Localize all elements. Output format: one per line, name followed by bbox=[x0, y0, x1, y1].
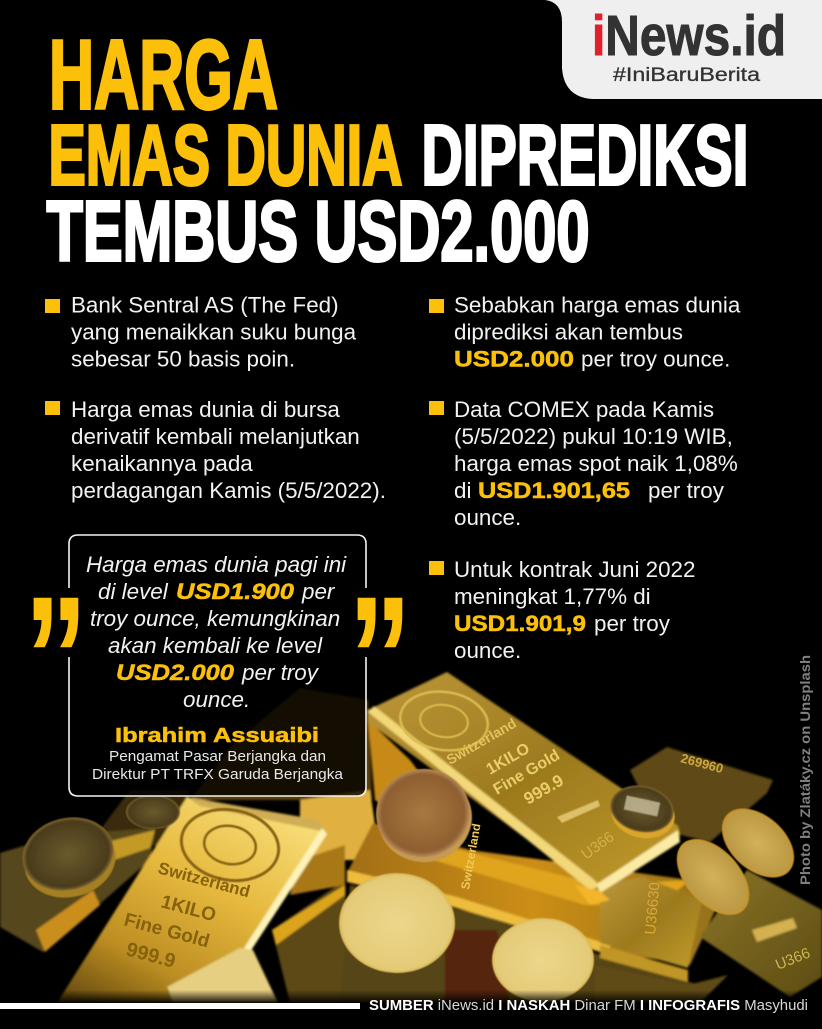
right quote mark: ” bbox=[348, 559, 412, 756]
embossed bar text: 999.9 bbox=[124, 939, 178, 973]
bullet block 5: ounce. bbox=[454, 638, 521, 663]
left column bullets bbox=[45, 292, 386, 503]
bullet block 4: (5/5/2022) pukul 10:19 WIB, bbox=[454, 424, 733, 449]
title: EMAS DUNIA bbox=[48, 108, 402, 204]
coin: american eagle bbox=[15, 808, 123, 907]
embossed bar text: 1KILO bbox=[484, 740, 533, 778]
embossed bar text: Switzerland bbox=[156, 859, 252, 901]
photo: pile of gold bars and coins bbox=[0, 672, 822, 1029]
embossed bar text: 999.9 bbox=[520, 771, 567, 808]
author title: Direktur PT TRFX Garuda Berjangka bbox=[92, 766, 344, 783]
embossed bar text: Switzerland bbox=[444, 715, 519, 768]
coin: krugerrand bbox=[369, 762, 479, 869]
bullet block 3 bbox=[429, 292, 741, 372]
coin: tilted right back bbox=[709, 795, 807, 891]
bullet block 1: Bank Sentral AS (The Fed) bbox=[71, 292, 339, 318]
bullet block 1 bbox=[45, 292, 357, 372]
bullet block 5: per troy bbox=[594, 611, 671, 636]
embossed bar text: Switzerland bbox=[458, 822, 484, 891]
bullet block 2: kenaikannya pada bbox=[71, 451, 253, 476]
bullet block 4: USD1.901,65 bbox=[478, 478, 630, 503]
quote text: ounce. bbox=[183, 687, 250, 712]
coin: tilted right front bbox=[663, 825, 763, 929]
embossed bar text: 269960 bbox=[679, 750, 725, 776]
logo wordmark: iNews.id bbox=[592, 4, 786, 68]
bullet block 5: meningkat 1,77% di bbox=[454, 584, 651, 609]
bullet block 2: Harga emas dunia di bursa bbox=[71, 397, 340, 422]
bullet block 1: sebesar 50 basis poin. bbox=[71, 346, 295, 372]
bullet block 4: di bbox=[454, 478, 471, 503]
bullet block 4: per troy bbox=[648, 478, 725, 503]
title: TEMBUS USD2.000 bbox=[46, 184, 590, 280]
bullet block 2: derivatif kembali melanjutkan bbox=[71, 424, 360, 449]
quote text: per troy bbox=[241, 660, 320, 685]
right column bullets bbox=[429, 292, 741, 663]
coin: plain bright bbox=[339, 873, 455, 973]
bullet block 3: diprediksi akan tembus bbox=[454, 320, 683, 344]
quote text: di level bbox=[98, 579, 169, 604]
quote text: USD1.900 bbox=[176, 579, 295, 604]
bullet block 5: Untuk kontrak Juni 2022 bbox=[454, 557, 695, 582]
quote box bbox=[24, 535, 412, 796]
bullet block 3: USD2.000 bbox=[454, 346, 574, 372]
bullet block 4: Data COMEX pada Kamis bbox=[454, 397, 714, 422]
embossed bar text: Fine Gold bbox=[490, 747, 563, 798]
embossed bar text: U366 bbox=[773, 945, 813, 974]
bullet block 3: per troy ounce. bbox=[581, 346, 730, 372]
bullet block 1: yang menaikkan suku bunga bbox=[71, 320, 357, 344]
bullet block 5: USD1.901,9 bbox=[454, 611, 586, 636]
footer bbox=[0, 997, 808, 1014]
bullet block 2: perdagangan Kamis (5/5/2022). bbox=[71, 478, 386, 503]
bullet block 4: ounce. bbox=[454, 505, 521, 530]
photo credit: Photo by Zlatáky.cz on Unsplash bbox=[797, 655, 813, 885]
bullet block 4 bbox=[429, 397, 738, 530]
bullet block 5 bbox=[429, 557, 695, 663]
embossed bar text: Fine Gold bbox=[122, 910, 212, 953]
quote text: USD2.000 bbox=[116, 660, 235, 685]
quote text: akan kembali ke level bbox=[108, 633, 323, 658]
author title: Pengamat Pasar Berjangka dan bbox=[109, 748, 326, 765]
bullet block 4: harga emas spot naik 1,08% bbox=[454, 451, 738, 476]
left quote mark: ” bbox=[24, 559, 88, 756]
quote text: troy ounce, kemungkinan bbox=[90, 606, 340, 631]
quote text: per bbox=[301, 579, 336, 604]
coin: bright engraved bbox=[492, 918, 594, 1002]
coin: philharmonic bbox=[606, 780, 679, 844]
embossed bar text bbox=[122, 715, 813, 974]
embossed bar text: U36630 bbox=[642, 882, 664, 935]
bullet block 3: Sebabkan harga emas dunia bbox=[454, 292, 741, 318]
quote author: Ibrahim Assuaibi bbox=[115, 724, 319, 747]
logo panel bbox=[545, 0, 822, 99]
footer credits: SUMBER iNews.id I NASKAH Dinar FM I INFOGRAFIS Masyhudi bbox=[369, 997, 808, 1014]
embossed bar text: U366 bbox=[578, 828, 617, 863]
quote text bbox=[86, 552, 347, 712]
quote text: Harga emas dunia pagi ini bbox=[86, 552, 347, 577]
coin: small dark coin bbox=[126, 795, 180, 829]
logo tagline: #IniBaruBerita bbox=[613, 65, 761, 86]
bullet block 2 bbox=[45, 397, 386, 503]
embossed bar text: 1KILO bbox=[159, 892, 218, 926]
title bbox=[46, 20, 748, 280]
author title bbox=[92, 748, 344, 783]
title: HARGA bbox=[49, 20, 278, 130]
